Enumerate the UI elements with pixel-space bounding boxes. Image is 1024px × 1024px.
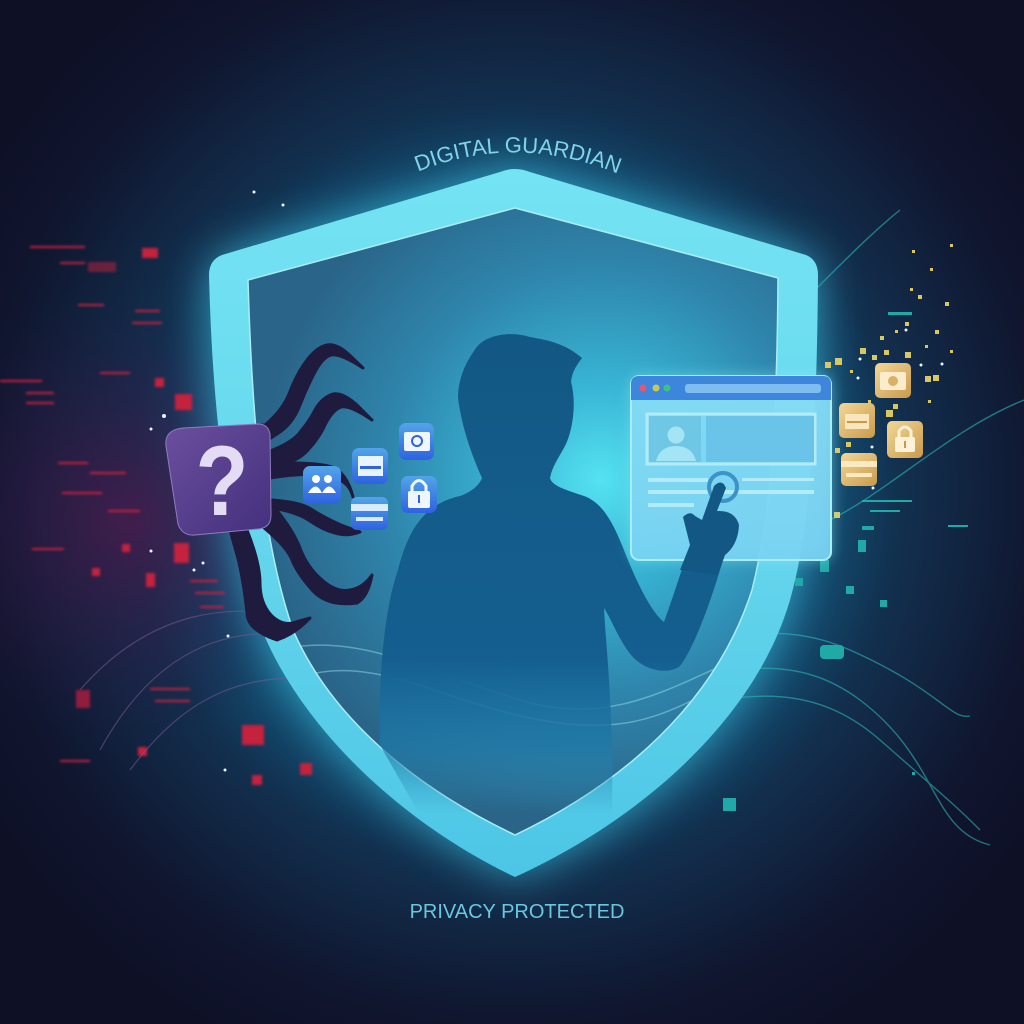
shield glow <box>209 169 818 877</box>
icon: id card <box>352 448 388 484</box>
tentacles <box>230 345 372 640</box>
wave lines: left <box>80 611 500 770</box>
shield <box>209 169 818 877</box>
icon: people <box>303 466 341 504</box>
caption: privacy protected: PRIVACY PROTECTED <box>410 901 624 923</box>
address bar <box>685 384 821 393</box>
tentacles and mystery box <box>166 345 372 640</box>
title: digital guardian: DIGITAL GUARDIAN <box>414 137 622 173</box>
blue app icons <box>303 423 437 530</box>
teal particles: right <box>723 312 968 811</box>
gold icons <box>839 363 923 486</box>
icon: gold camera <box>875 363 911 398</box>
touch ring <box>709 473 737 501</box>
window frame <box>631 376 831 560</box>
red data particles: left <box>0 246 312 785</box>
white sparkles <box>150 190 944 772</box>
icon: camera <box>399 423 434 460</box>
person silhouette <box>380 334 725 815</box>
icon: gold padlock <box>887 421 923 458</box>
window controls <box>640 384 670 392</box>
gold particles: right <box>825 244 953 518</box>
shield interior <box>248 208 778 835</box>
mystery box: ? <box>196 426 248 536</box>
profile card <box>647 414 815 464</box>
content lines <box>648 478 814 507</box>
hand <box>680 482 739 575</box>
browser window <box>631 376 831 575</box>
title bar <box>631 376 831 400</box>
window glow <box>631 376 831 560</box>
icon: gold id card <box>839 403 875 438</box>
interior waves <box>301 644 714 726</box>
icon: padlock <box>401 476 437 513</box>
mystery box <box>166 424 271 536</box>
icon: gold card <box>841 453 877 486</box>
wave lines: right <box>590 210 1024 845</box>
shield rim <box>209 169 818 877</box>
icon: credit card <box>351 497 388 530</box>
